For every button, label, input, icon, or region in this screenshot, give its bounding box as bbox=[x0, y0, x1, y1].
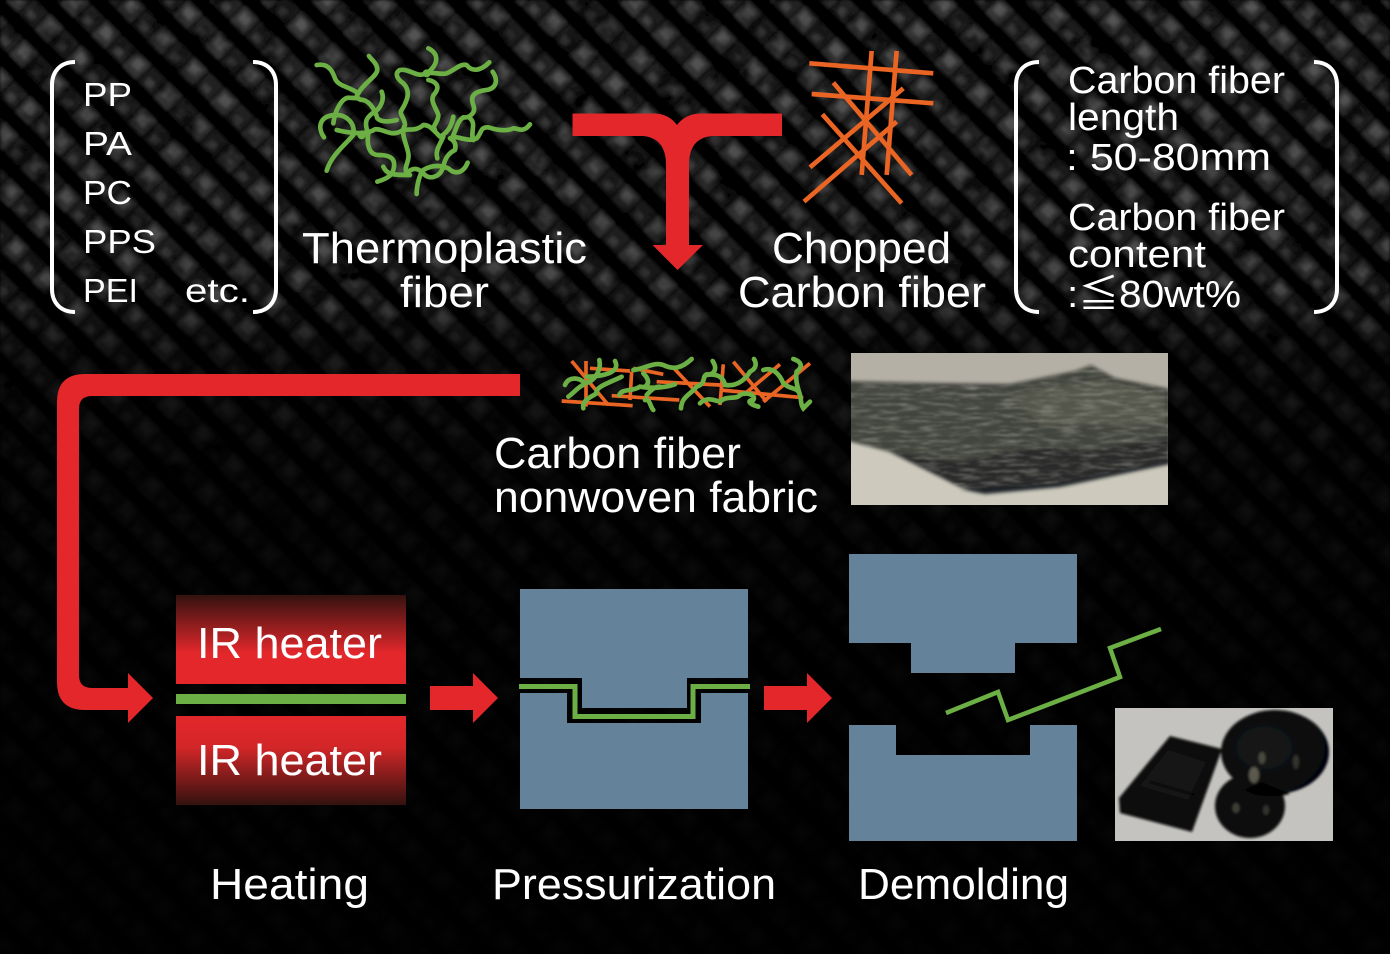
heading: chopped carbon fiber: Carbon fiber bbox=[738, 268, 986, 317]
heading: thermoplastic fiber: fiber bbox=[400, 268, 489, 317]
bracket: resin list right bbox=[253, 62, 276, 312]
photo: nonwoven fabric sample bbox=[845, 353, 1170, 510]
text: specs: : 50-80mm bbox=[1066, 137, 1271, 179]
heater: bottom bbox=[176, 716, 406, 805]
mold: lower bbox=[520, 693, 748, 809]
panel: resin list bbox=[52, 62, 276, 312]
heater: top bbox=[176, 595, 406, 684]
text: resin names: PC bbox=[83, 174, 132, 211]
heading: carbon fiber nonwoven fabric bbox=[494, 429, 818, 522]
text: resin names bbox=[83, 76, 250, 309]
photo: molded parts bbox=[1115, 708, 1333, 841]
icon: thermoplastic fibers bbox=[317, 48, 530, 194]
arrow: pressurization to demolding bbox=[764, 673, 832, 723]
label: heating: Heating bbox=[210, 860, 369, 909]
text: resin names: etc. bbox=[185, 272, 250, 309]
background: carbon weave texture bbox=[0, 0, 1390, 626]
arrow: heating to pressurization bbox=[430, 673, 498, 723]
text: resin names: PPS bbox=[83, 223, 156, 260]
panel: pressurization mold bbox=[519, 589, 750, 809]
bracket: specs right bbox=[1314, 62, 1337, 312]
heading: thermoplastic fiber: Thermoplastic bbox=[302, 224, 587, 273]
icon: nonwoven fabric mix bbox=[562, 359, 810, 410]
bracket: specs left bbox=[1016, 62, 1039, 312]
panel: demolding mold bbox=[849, 554, 1161, 841]
icon: chopped carbon fibers bbox=[804, 51, 933, 203]
text: specs: Carbon fiber bbox=[1068, 197, 1285, 239]
text: specs: length bbox=[1068, 97, 1179, 139]
text: resin names: PEI bbox=[83, 272, 138, 309]
fiber sheet: heating bbox=[176, 694, 406, 704]
panel: carbon fiber specs bbox=[1016, 60, 1337, 316]
arrow: long feed arrow to heating bbox=[57, 374, 520, 723]
text: specs bbox=[1066, 60, 1285, 316]
label: pressurization: Pressurization bbox=[492, 860, 776, 909]
label: top heater: IR heater bbox=[197, 619, 382, 668]
bracket: resin list left bbox=[52, 62, 75, 312]
heading: carbon fiber nonwoven fabric: nonwoven fabric bbox=[494, 473, 818, 522]
text: specs: content bbox=[1068, 234, 1206, 276]
mold: lower open bbox=[849, 725, 1077, 841]
text: specs: :≦80wt% bbox=[1067, 274, 1241, 316]
text: resin names: PP bbox=[83, 76, 132, 113]
mold: upper open bbox=[849, 554, 1077, 673]
label: bottom heater: IR heater bbox=[197, 736, 382, 785]
mold: upper bbox=[520, 589, 748, 708]
fiber sheet: pressed bbox=[519, 686, 750, 716]
label: demolding: Demolding bbox=[858, 860, 1069, 909]
fiber sheet: formed part bbox=[946, 629, 1161, 720]
panel: heating step bbox=[176, 595, 406, 805]
heading: chopped carbon fiber: Chopped bbox=[772, 224, 951, 273]
heading: carbon fiber nonwoven fabric: Carbon fiber bbox=[494, 429, 741, 478]
heading: chopped carbon fiber bbox=[738, 224, 986, 317]
heading: thermoplastic fiber bbox=[302, 224, 587, 317]
arrow: merge arrow bbox=[572, 114, 782, 270]
text: resin names: PA bbox=[83, 125, 132, 162]
text: specs: Carbon fiber bbox=[1068, 60, 1285, 102]
